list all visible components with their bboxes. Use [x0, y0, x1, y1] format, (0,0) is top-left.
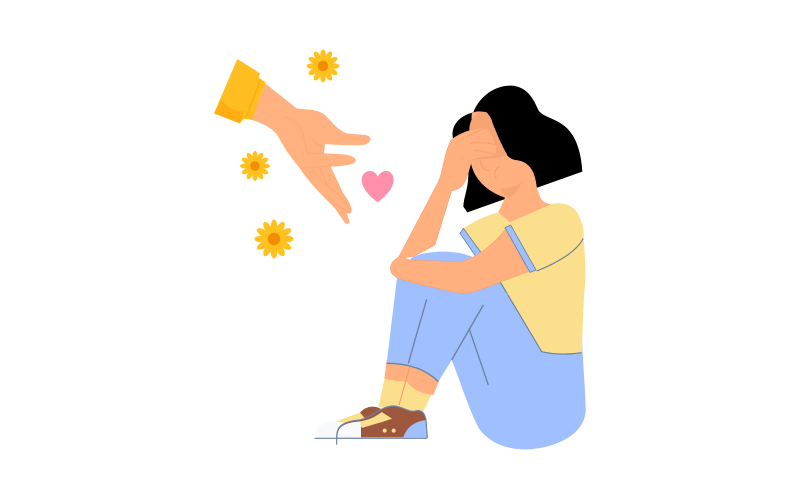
- flower bottom: [254, 220, 294, 258]
- shoes: [315, 422, 340, 437]
- flower middle: [240, 151, 270, 181]
- left sleeve band: [460, 228, 482, 258]
- knee: [397, 252, 508, 295]
- chin shadow: [500, 182, 522, 198]
- trousers: [387, 267, 586, 449]
- facial lines: [480, 160, 499, 178]
- hair: [452, 86, 582, 212]
- upper arm: [390, 228, 528, 294]
- socks: [378, 377, 437, 412]
- seated woman: [315, 86, 586, 449]
- shirt, face and arms: [390, 111, 585, 354]
- right sleeve band: [505, 225, 536, 272]
- helping hand with sleeve: [214, 59, 371, 224]
- forearm and hand: [398, 127, 497, 258]
- shirt: [463, 203, 585, 354]
- neck and face: [471, 111, 551, 222]
- flower top: [306, 50, 340, 82]
- trousers and legs: [315, 267, 586, 449]
- heart: [362, 171, 394, 202]
- forehead shadow: [469, 112, 507, 160]
